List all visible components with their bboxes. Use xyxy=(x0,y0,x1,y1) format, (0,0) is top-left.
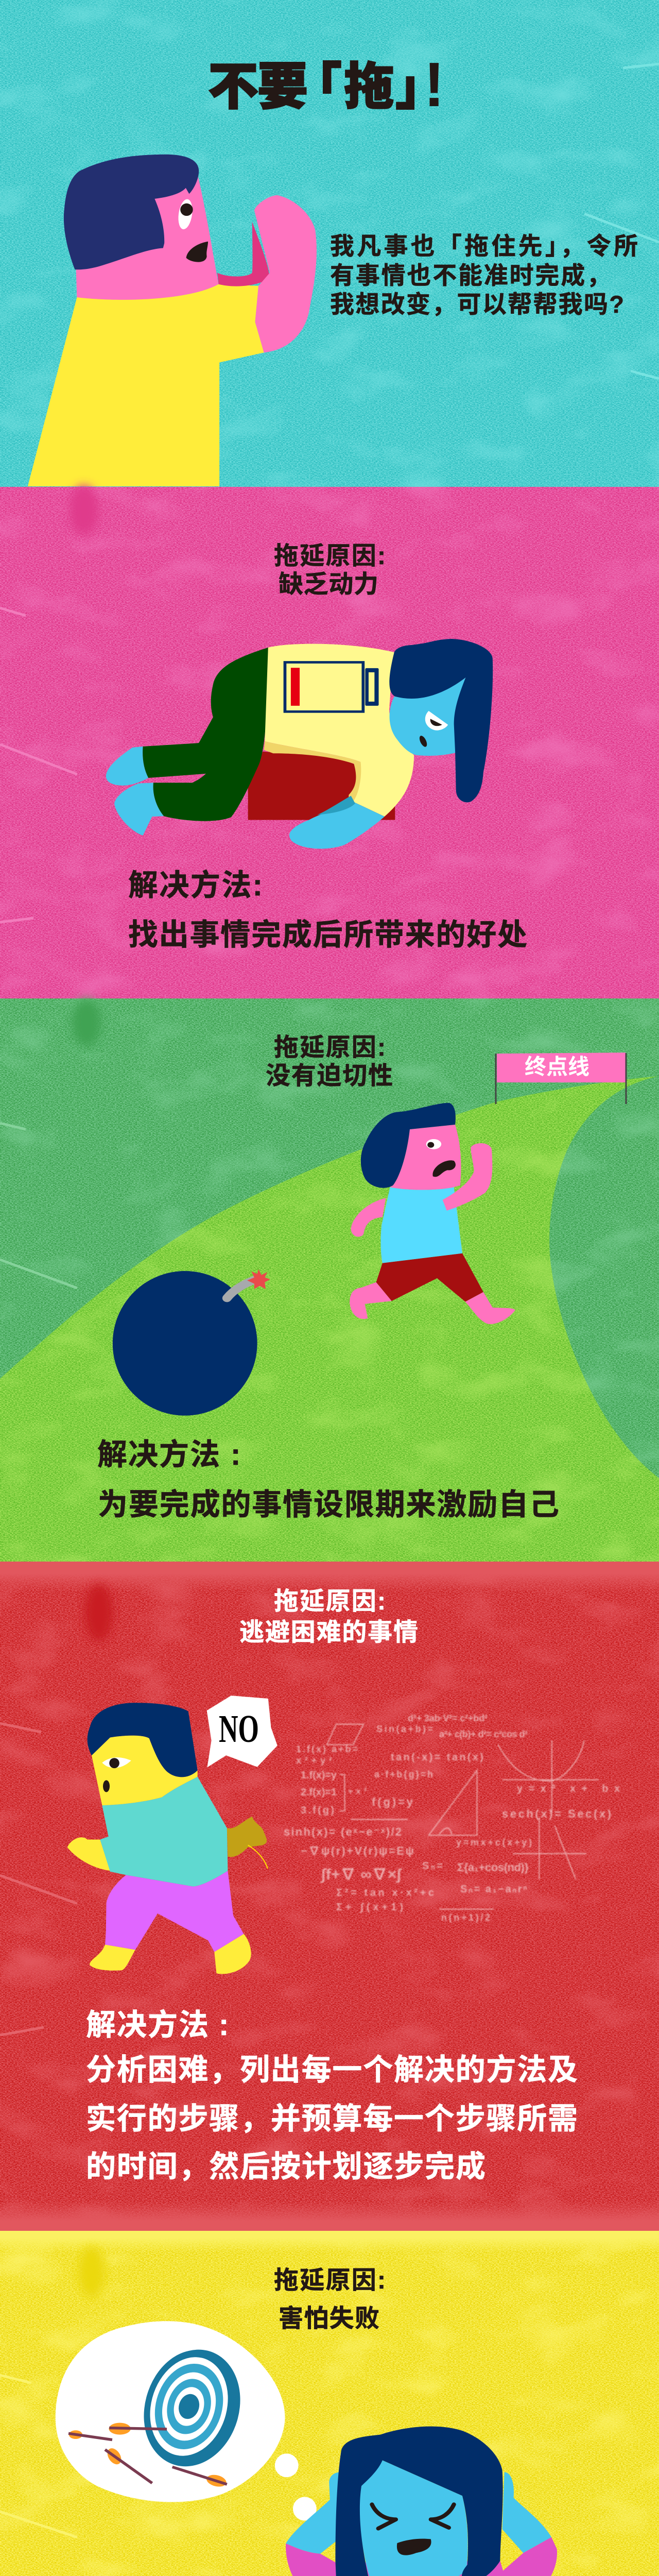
solution text: 实行的步骤，并预算每一个步骤所需 xyxy=(86,2102,578,2136)
reason heading: 缺乏动力 xyxy=(279,571,378,598)
panel: intro xyxy=(0,0,659,487)
running character xyxy=(350,1103,515,1324)
panel 5 background xyxy=(0,2231,659,2576)
solution text: 解决方法: xyxy=(128,869,263,902)
panel: fear of failure xyxy=(0,2231,659,2576)
character with empty battery xyxy=(106,639,493,849)
math formulas on chalkboard: sech(x)= Sec(x) xyxy=(502,1807,611,1820)
math formulas on chalkboard: Sₙ= xyxy=(422,1860,443,1872)
character holding head xyxy=(286,2427,557,2576)
reason heading: 拖延原因: xyxy=(274,543,386,570)
reason heading xyxy=(274,543,386,598)
math formulas on chalkboard: Σ²= tan x·x²+c xyxy=(336,1887,434,1899)
solution text: 为要完成的事情设限期来激励自己 xyxy=(98,1488,559,1521)
math formulas on chalkboard: +x³ xyxy=(348,1787,367,1796)
reason heading: 拖延原因: xyxy=(274,1588,386,1615)
thought bubble with target xyxy=(56,2321,317,2520)
green road xyxy=(0,1076,659,1562)
bomb xyxy=(113,1269,270,1416)
panel 4 background xyxy=(0,1562,659,2231)
math formulas on chalkboard: −∇ψ(r)+V(r)ψ=Eψ xyxy=(301,1844,414,1857)
solution text: 的时间，然后按计划逐步完成 xyxy=(86,2150,485,2183)
math formulas on chalkboard: 1.f(x)=y xyxy=(301,1770,337,1781)
solution text: 解决方法: xyxy=(97,1438,240,1471)
reason heading: 害怕失败 xyxy=(279,2305,379,2332)
math formulas on chalkboard: Σ+ ∫(x+1) xyxy=(336,1902,403,1913)
solution text xyxy=(128,869,527,952)
math formulas on chalkboard: 2.f(x)=1 xyxy=(301,1787,337,1798)
panel 3 background xyxy=(0,998,659,1562)
math formulas on chalkboard: ∫f+∇ ∞∇×∫ xyxy=(320,1866,403,1883)
reason heading: 没有迫切性 xyxy=(266,1062,393,1090)
icon: target xyxy=(131,2340,253,2476)
character shouting xyxy=(28,155,317,486)
speech bubble: NO xyxy=(207,1696,278,1767)
reason heading xyxy=(239,1588,418,1646)
reason heading: 拖延原因: xyxy=(274,1034,386,1061)
solution text xyxy=(86,2008,578,2183)
title: 不要「拖」 xyxy=(208,58,446,115)
finish line flag: 终点线 xyxy=(525,1055,589,1079)
panel: no urgency xyxy=(0,998,659,1562)
math formulas on chalkboard: d²+ 3ab·V²= c²+bd² xyxy=(408,1713,488,1723)
panel 1 background xyxy=(0,0,659,487)
math formulas on chalkboard: a·f+b{g}=h xyxy=(374,1769,433,1780)
reason heading xyxy=(274,2267,386,2332)
reason heading: 逃避困难的事情 xyxy=(239,1619,418,1646)
math formulas on chalkboard: Sin(a+b)= xyxy=(376,1724,433,1734)
reason heading: 拖延原因: xyxy=(274,2267,386,2294)
finish line flag xyxy=(496,1053,626,1104)
math formulas on chalkboard: 1.f(x) a+b= xyxy=(296,1744,358,1754)
speech bubble: NO: NO xyxy=(219,1707,259,1751)
math formulas on chalkboard: a²+ c(b)+ d²= c²cos d² xyxy=(439,1729,528,1739)
icon: arrows xyxy=(68,2423,228,2488)
math formulas on chalkboard: y=x² x+ bx xyxy=(517,1783,620,1794)
math formulas on chalkboard: f(g)=y xyxy=(372,1795,413,1808)
icon: low battery xyxy=(285,662,379,711)
speech text: 我凡事也「拖住先」，令所 xyxy=(330,232,638,260)
reason heading xyxy=(266,1034,393,1090)
solution text xyxy=(97,1438,559,1521)
math formulas on chalkboard: x²+y² xyxy=(296,1755,332,1766)
panel 2 background xyxy=(0,485,659,998)
math formulas on chalkboard: sinh(x)= (eˣ−e⁻ˣ)/2 xyxy=(284,1825,402,1838)
title exclamation mark: ! xyxy=(424,49,445,120)
character walking away xyxy=(67,1703,268,1974)
math formulas on chalkboard xyxy=(284,1713,620,1923)
panel: lack of motivation xyxy=(0,485,659,998)
solution text: 解决方法: xyxy=(86,2008,229,2042)
math formulas on chalkboard: y=mx+c(x+y) xyxy=(456,1837,532,1848)
math formulas on chalkboard: n(n+1)/2 xyxy=(441,1912,490,1923)
math formulas on chalkboard: Sₙ= a₁−aₙrⁿ xyxy=(460,1884,527,1895)
math formulas on chalkboard: 3.f(g) xyxy=(301,1805,334,1816)
solution text: 找出事情完成后所带来的好处 xyxy=(128,918,527,952)
solution text: 分析困难，列出每一个解决的方法及 xyxy=(86,2053,578,2087)
panel: avoiding difficult things xyxy=(0,1562,659,2231)
speech text xyxy=(330,232,638,318)
math formulas on chalkboard: Σ{a₁+cos(nd)} xyxy=(457,1861,529,1874)
math formulas on chalkboard: tan(-x)= tan(x) xyxy=(391,1752,483,1763)
speech text: 我想改变，可以帮帮我吗? xyxy=(330,291,624,318)
speech text: 有事情也不能准时完成， xyxy=(330,262,611,289)
